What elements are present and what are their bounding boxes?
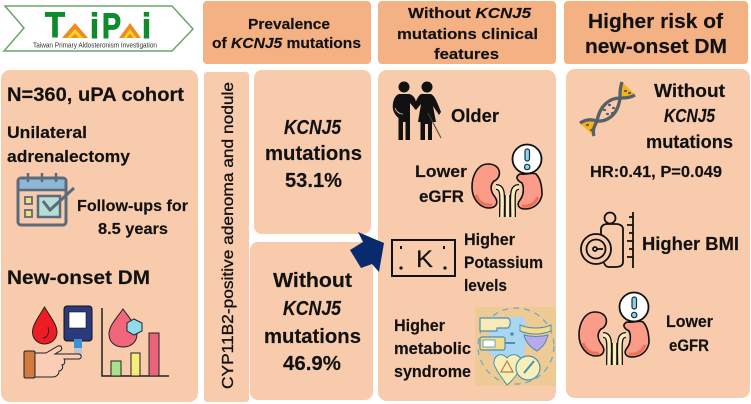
panel: KCNJ5 mutations: KCNJ5 <box>284 117 342 139</box>
icon: potassium box <box>392 240 455 276</box>
panel: CYP11B2 label: CYP11B2-positive adenoma and nodule <box>220 82 237 389</box>
panel: without KCNJ5 mutations <box>250 242 373 400</box>
panel: cohort: adrenalectomy <box>7 147 131 166</box>
logo: TaiPai: T <box>45 6 65 45</box>
header: clinical features <box>378 1 556 64</box>
panel: without KCNJ5 mutations: Without <box>273 270 352 292</box>
header: prevalence: of KCNJ5 mutations <box>212 35 361 52</box>
panel: without KCNJ5 mutations: mutations <box>264 326 361 348</box>
icon: kidneys with alert <box>579 292 649 365</box>
icon: kidneys with alert <box>472 144 542 217</box>
panel: higher risk: eGFR <box>669 337 709 355</box>
panel: higher risk: KCNJ5 <box>664 106 716 126</box>
panel: KCNJ5 mutations <box>254 70 371 234</box>
icon: elderly couple <box>393 82 441 140</box>
icon: metabolic syndrome <box>475 307 556 386</box>
header: higher risk: Higher risk of <box>588 11 723 33</box>
panel: higher risk: Lower <box>666 313 714 331</box>
icon: calendar <box>18 173 74 225</box>
panel: without KCNJ5 mutations: KCNJ5 <box>283 298 342 320</box>
panel: clinical features: Older <box>451 106 499 126</box>
panel: cohort: New-onset DM <box>7 267 150 289</box>
icon: potassium box: K <box>416 246 433 273</box>
logo: TaiPai: i <box>90 7 99 46</box>
panel: clinical features: metabolic <box>394 340 471 358</box>
header: prevalence <box>203 1 371 64</box>
header: clinical features: mutations clinical <box>397 26 538 43</box>
panel: clinical features: syndrome <box>394 363 471 381</box>
panel: cohort <box>1 70 198 402</box>
panel: clinical features: Lower <box>415 162 467 181</box>
panel: CYP11B2 label <box>204 72 249 402</box>
arrow <box>350 232 384 272</box>
panel: clinical features: Potassium <box>464 254 543 272</box>
panel: clinical features: levels <box>464 277 507 295</box>
panel: cohort: 8.5 years <box>98 221 168 238</box>
header: clinical features: Without KCNJ5 <box>408 5 532 22</box>
header: clinical features: features <box>434 46 499 63</box>
icon: DNA <box>580 82 635 136</box>
icon: glucose test <box>24 306 169 378</box>
panel: clinical features <box>378 70 556 401</box>
header: prevalence: Prevalence <box>248 16 330 33</box>
panel: cohort: Unilateral <box>7 123 87 142</box>
logo: TaiPai: P <box>102 7 121 46</box>
panel: KCNJ5 mutations: 53.1% <box>285 170 342 192</box>
panel: higher risk: Without <box>654 81 725 101</box>
panel: without KCNJ5 mutations: 46.9% <box>283 353 341 375</box>
panel: clinical features: Higher <box>394 317 446 335</box>
panel: higher risk <box>566 69 750 398</box>
panel: higher risk: Higher BMI <box>642 234 739 254</box>
logo: TaiPai <box>4 6 193 51</box>
header: higher risk: new-onset DM <box>585 36 727 58</box>
logo: TaiPai: i <box>142 7 151 46</box>
panel: clinical features: Higher <box>464 231 516 249</box>
panel: higher risk: HR:0.41, P=0.049 <box>590 164 722 181</box>
panel: cohort: N=360, uPA cohort <box>7 84 185 106</box>
icon: BMI <box>581 212 633 268</box>
panel: KCNJ5 mutations: mutations <box>265 143 362 165</box>
header: higher risk <box>564 1 748 64</box>
panel: cohort: Follow-ups for <box>77 198 188 215</box>
panel: higher risk: mutations <box>646 132 733 152</box>
panel: clinical features: eGFR <box>419 187 464 206</box>
logo: TaiPai: Taiwan Primary Aldosteronism Investigation <box>33 42 157 50</box>
